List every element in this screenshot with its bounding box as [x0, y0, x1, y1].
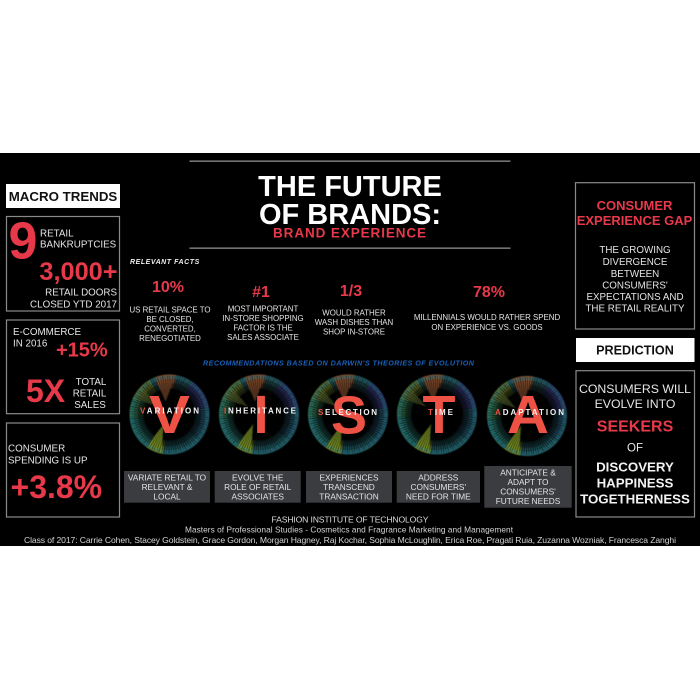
VISTA circle: variation: V ARIATION	[140, 406, 199, 415]
fact: number one: #1	[252, 284, 270, 301]
VISTA circle: time	[391, 368, 483, 461]
panel: bankruptcies and door closures: CLOSED YTD 2017	[30, 299, 117, 310]
panel: consumer experience gap: CONSUMERS'	[602, 280, 668, 292]
panel: prediction	[576, 371, 694, 517]
panel: e-commerce: E-COMMERCE	[13, 327, 81, 338]
caption: adaptation	[484, 466, 572, 508]
panel: prediction heading	[576, 338, 694, 362]
caption: inheritance: ROLE OF RETAIL	[224, 482, 292, 492]
fact: one third: SHOP IN-STORE	[323, 328, 385, 337]
panel: consumer experience gap	[576, 183, 694, 329]
caption: variation: RELEVANT &	[142, 482, 193, 492]
fact: 10 percent: CONVERTED,	[144, 324, 196, 334]
VISTA circle: adaptation: A	[507, 385, 549, 445]
panel: bankruptcies and door closures: 3,000+	[39, 258, 118, 286]
panel: e-commerce	[6, 320, 120, 414]
relevant facts	[129, 259, 560, 343]
fact: one third: 1/3	[340, 283, 362, 300]
caption: time: CONSUMERS'	[411, 482, 466, 492]
panel: e-commerce: IN 2016	[13, 339, 48, 350]
panel: consumer experience gap: THE RETAIL REALITY	[585, 304, 685, 315]
caption: inheritance: EVOLVE THE	[232, 473, 284, 483]
VISTA circle: selection	[302, 368, 394, 461]
caption: time: NEED FOR TIME	[406, 491, 471, 501]
panel: bankruptcies and door closures: RETAIL DOORS	[45, 288, 117, 299]
caption: inheritance	[215, 471, 301, 503]
panel: e-commerce: 5X	[26, 373, 66, 409]
panel: e-commerce: +15%	[56, 340, 108, 362]
panel: prediction: EVOLVE INTO	[595, 397, 675, 411]
fact: one third: WASH DISHES THAN	[315, 318, 394, 327]
panel: bankruptcies and door closures: 9	[8, 212, 37, 270]
title block	[190, 160, 510, 249]
VISTA circle: adaptation	[481, 370, 573, 462]
panel: macro trends heading: MACRO TRENDS	[9, 189, 117, 204]
panel: e-commerce: RETAIL	[73, 389, 107, 400]
panel: prediction: HAPPINESS	[597, 476, 674, 491]
caption: inheritance: ASSOCIATES	[231, 491, 284, 501]
VISTA circle: adaptation: ADAPTATION	[495, 408, 564, 417]
footer credits	[24, 514, 676, 545]
VISTA circle: variation	[123, 368, 216, 461]
panel: consumer spending	[6, 423, 120, 517]
caption: time: ADDRESS	[418, 473, 459, 483]
heading: relevant facts: RELEVANT FACTS	[130, 259, 200, 266]
VISTA circle: inheritance	[213, 368, 305, 461]
panel: consumer experience gap: EXPECTATIONS AND	[586, 292, 684, 303]
VISTA circle: inheritance: I	[253, 385, 269, 445]
VISTA circle: time: T	[422, 385, 456, 445]
title block: THE FUTURE	[258, 171, 442, 203]
panel: bankruptcies and door closures	[6, 212, 120, 311]
panel: macro trends heading	[6, 184, 120, 208]
panel: prediction: OF	[627, 443, 643, 455]
fact: 10 percent: 10%	[152, 279, 184, 296]
panel: prediction heading: PREDICTION	[596, 343, 674, 357]
panel: e-commerce: SALES	[74, 400, 106, 411]
footer credits: Masters of Professional Studies - Cosmetics and Fragrance Marketing and Management	[185, 524, 514, 534]
fact: number one: SALES ASSOCIATE	[227, 333, 299, 342]
panel: consumer spending: +3.8%	[10, 469, 102, 505]
fact: 78 percent: MILLENNIALS WOULD RATHER SPEND	[414, 313, 560, 322]
caption: selection: TRANSCEND	[323, 482, 375, 492]
VISTA circle: inheritance: INHERITANCE	[224, 406, 297, 415]
caption: variation: LOCAL	[153, 491, 181, 501]
panel: bankruptcies and door closures: RETAIL	[40, 229, 74, 240]
fact: one third	[315, 283, 394, 337]
caption: adaptation: ADAPT TO	[507, 477, 549, 487]
caption: variation: VARIATE RETAIL TO	[128, 473, 207, 483]
fact: 78 percent	[414, 284, 560, 332]
panel: bankruptcies and door closures: BANKRUPTCIES	[40, 240, 117, 251]
panel: consumer spending: SPENDING IS UP	[8, 456, 88, 466]
caption: selection: TRANSACTION	[319, 491, 379, 501]
fact: number one	[222, 284, 304, 342]
VISTA circle: variation: V	[149, 385, 190, 445]
fact: one third: WOULD RATHER	[322, 309, 386, 318]
caption: adaptation: FUTURE NEEDS	[496, 496, 561, 506]
fact: number one: IN-STORE SHOPPING	[222, 314, 304, 323]
fact: 78 percent: ON EXPERIENCE VS. GOODS	[431, 323, 543, 332]
fact: 10 percent: US RETAIL SPACE TO	[129, 306, 211, 315]
panel: consumer spending: CONSUMER	[8, 444, 65, 455]
caption: selection	[306, 471, 392, 503]
caption: variation	[124, 471, 210, 503]
panel: consumer experience gap: DIVERGENCE	[603, 257, 668, 268]
panel: prediction: DISCOVERY	[596, 460, 674, 475]
fact: 10 percent	[129, 279, 211, 343]
footer credits: Class of 2017: Carrie Cohen, Stacey Goldstein, Grace Gordon, Morgan Hagney, Raj Kochar, Sophia McLoughlin, Erica Roe, Pragati Ruia, Zuzanna Wozniak, Francesca Zanghi	[24, 535, 676, 545]
fact: 78 percent: 78%	[473, 284, 505, 301]
footer credits: FASHION INSTITUTE OF TECHNOLOGY	[272, 514, 429, 524]
VISTA circle: selection: SELECTION	[318, 408, 377, 417]
caption: adaptation: ANTICIPATE &	[500, 468, 556, 478]
fact: number one: FACTOR IS THE	[233, 324, 293, 332]
panel: consumer experience gap: EXPERIENCE GAP	[577, 213, 693, 228]
fact: 10 percent: BE CLOSED,	[146, 315, 194, 324]
fact: number one: MOST IMPORTANT	[228, 305, 298, 314]
title block: OF BRANDS:	[259, 199, 441, 231]
VISTA circle: time: TIME	[428, 408, 454, 417]
caption: adaptation: CONSUMERS'	[500, 486, 556, 496]
VISTA circle: selection: S	[331, 386, 367, 446]
caption: time	[397, 471, 480, 503]
panel: consumer experience gap: CONSUMER	[597, 198, 673, 213]
panel: e-commerce: TOTAL	[76, 377, 107, 388]
panel: prediction: SEEKERS	[597, 419, 674, 436]
panel: consumer experience gap: THE GROWING	[599, 245, 671, 256]
fact: 10 percent: RENEGOTIATED	[139, 334, 201, 343]
panel: consumer experience gap: BETWEEN	[611, 269, 659, 280]
black poster background	[0, 153, 700, 546]
panel: prediction: CONSUMERS WILL	[579, 382, 691, 396]
title block: BRAND EXPERIENCE	[273, 226, 427, 241]
recommendations heading: RECOMMENDATIONS BASED ON DARWIN'S THEORIES OF EVOLUTION	[203, 358, 475, 368]
panel: prediction: TOGETHERNESS	[580, 491, 690, 506]
caption: selection: EXPERIENCES	[319, 473, 379, 483]
